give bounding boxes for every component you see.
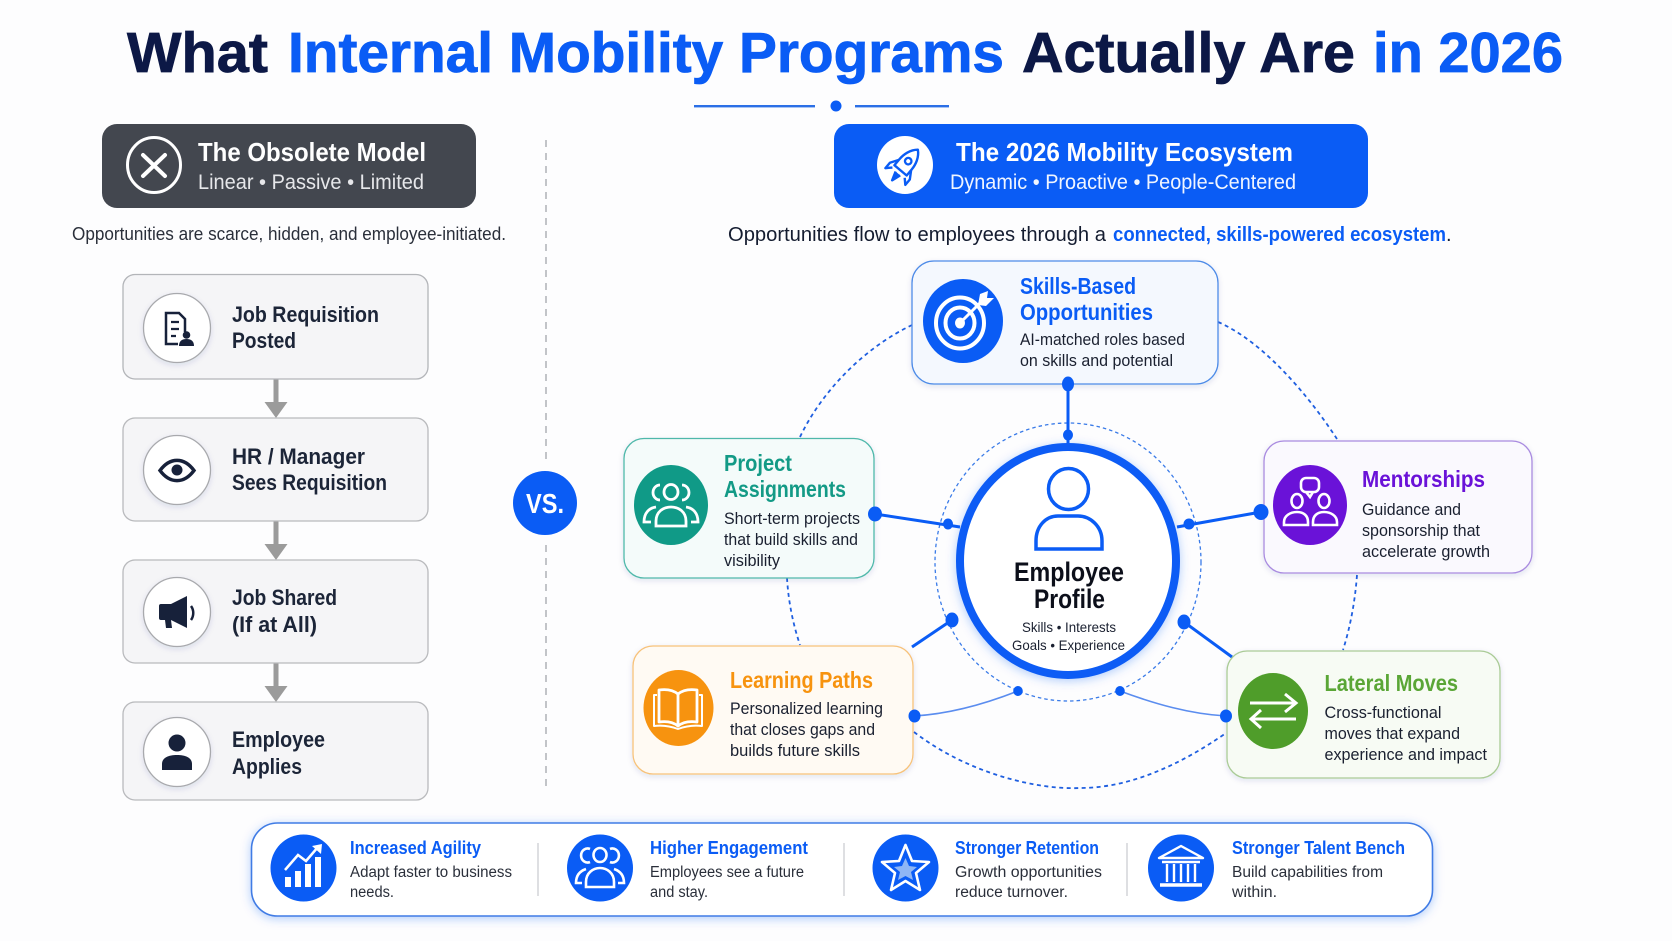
- card: mentorships: sponsorship that: [1362, 522, 1480, 540]
- title: in 2026: [1373, 21, 1563, 85]
- outcome: stronger talent bench: Build capabilities from: [1232, 864, 1383, 881]
- vs badge: VS.: [526, 488, 564, 519]
- card: project assignments: Project: [724, 450, 792, 476]
- icon: institution building: [1159, 846, 1203, 885]
- employee profile hub: Goals • Experience: [1012, 637, 1125, 653]
- icon: team: [644, 484, 698, 526]
- step: hr manager sees requisition: [123, 418, 428, 521]
- title: Internal Mobility Programs: [288, 21, 1004, 85]
- card: project assignments: Short-term projects: [724, 510, 860, 528]
- card: learning paths: Personalized learning: [730, 700, 883, 718]
- icon: rocket: [882, 141, 928, 189]
- card: lateral moves: moves that expand: [1324, 725, 1460, 743]
- title: [127, 21, 1563, 85]
- vs badge: [513, 471, 577, 535]
- step: employee applies: Employee: [232, 727, 325, 752]
- outcome: stronger talent bench: Stronger Talent Bench: [1232, 838, 1405, 858]
- card: skills-based opportunities: on skills and potential: [1020, 352, 1173, 370]
- card: mentorships: [1264, 441, 1532, 573]
- step: hr manager sees requisition: Sees Requisition: [232, 470, 387, 495]
- card: project assignments: that build skills and: [724, 531, 858, 549]
- outcome: increased agility: needs.: [350, 884, 394, 901]
- card: skills-based opportunities: [912, 261, 1218, 384]
- step: job shared: [123, 560, 428, 663]
- title divider: [694, 100, 949, 112]
- panel: outcomes bar: [252, 823, 1432, 916]
- step: employee applies: [123, 702, 428, 800]
- connector lines: [875, 384, 1261, 716]
- panel: 2026 ecosystem header: Dynamic • Proactive • People-Centered: [950, 171, 1296, 194]
- icon: person: [162, 734, 192, 770]
- outcome: higher engagement: Higher Engagement: [650, 838, 808, 858]
- title: What: [127, 21, 268, 85]
- employee profile hub: [960, 447, 1176, 675]
- card: learning paths: builds future skills: [730, 742, 860, 760]
- icon: x in circle: [128, 138, 180, 192]
- outcome: higher engagement: and stay.: [650, 884, 708, 901]
- employee profile hub: Profile: [1034, 584, 1105, 614]
- panel: obsolete model header: The Obsolete Model: [198, 137, 426, 167]
- employee profile hub: Employee: [1014, 557, 1124, 587]
- step: hr manager sees requisition: HR / Manager: [232, 444, 365, 469]
- outcome: stronger retention: [872, 834, 1102, 902]
- step: job shared: Job Shared: [232, 585, 337, 610]
- panel: obsolete model header: [102, 124, 476, 208]
- card: mentorships: Guidance and: [1362, 501, 1461, 519]
- ecosystem description: .: [1446, 224, 1452, 246]
- card: learning paths: that closes gaps and: [730, 721, 875, 739]
- card: project assignments: [624, 438, 874, 578]
- employee profile hub: Skills • Interests: [1022, 619, 1116, 635]
- card: skills-based opportunities: Skills-Based: [1020, 273, 1136, 299]
- icon: team: [576, 848, 624, 887]
- card: learning paths: [633, 646, 913, 774]
- card: lateral moves: Cross-functional: [1324, 704, 1442, 722]
- icon: document with person: [166, 313, 194, 346]
- outcome: increased agility: Increased Agility: [350, 838, 481, 858]
- card: mentorships: Mentorships: [1362, 466, 1485, 492]
- card: learning paths: Learning Paths: [730, 667, 873, 693]
- icon: swap arrows: [1250, 694, 1296, 728]
- connector dots: [868, 376, 1268, 722]
- icon: person outline: [1036, 468, 1102, 549]
- inner dashed orbit: [935, 423, 1201, 701]
- outcome: stronger retention: reduce turnover.: [955, 884, 1068, 901]
- outcome: higher engagement: [567, 834, 808, 902]
- step: employee applies: Applies: [232, 754, 302, 779]
- outcome: stronger talent bench: within.: [1231, 884, 1277, 901]
- card: project assignments: Assignments: [724, 476, 846, 502]
- outcome: stronger talent bench: [1148, 834, 1405, 902]
- ecosystem description: connected, skills-powered ecosystem: [1113, 224, 1446, 246]
- icon: mentors with speech bubble: [1284, 478, 1337, 525]
- card: project assignments: visibility: [724, 552, 781, 570]
- title: Actually Are: [1022, 21, 1355, 85]
- panel: 2026 ecosystem header: The 2026 Mobility Ecosystem: [956, 137, 1293, 167]
- outcome: stronger retention: Stronger Retention: [955, 838, 1099, 858]
- card: lateral moves: experience and impact: [1324, 746, 1487, 764]
- outcome: higher engagement: Employees see a future: [650, 864, 804, 881]
- flow arrows: [264, 379, 288, 702]
- icon: megaphone: [159, 596, 193, 628]
- step: job requisition posted: Posted: [232, 328, 296, 353]
- icon: target with arrow: [936, 291, 994, 348]
- outcome: increased agility: Adapt faster to business: [350, 864, 512, 881]
- step: job requisition posted: [123, 274, 428, 379]
- icon: growth chart: [285, 844, 322, 887]
- outcome: stronger retention: Growth opportunities: [955, 864, 1102, 881]
- outcome: increased agility: [270, 834, 512, 902]
- vertical dashed divider: [545, 140, 547, 790]
- card: lateral moves: Lateral Moves: [1324, 670, 1458, 696]
- icon: open book: [654, 690, 702, 729]
- obsolete model description: Opportunities are scarce, hidden, and employee-initiated.: [72, 224, 506, 244]
- panel: obsolete model header: Linear • Passive • Limited: [198, 171, 424, 194]
- panel: 2026 ecosystem header: [834, 124, 1368, 208]
- card: skills-based opportunities: AI-matched roles based: [1020, 331, 1185, 349]
- ecosystem description: Opportunities flow to employees through a: [728, 224, 1107, 246]
- card: lateral moves: [1227, 651, 1500, 778]
- ecosystem description: [728, 224, 1452, 246]
- outer dashed orbit: [787, 322, 1357, 788]
- icon: star: [882, 845, 929, 890]
- step: job shared: (If at All): [232, 612, 317, 637]
- icon: eye: [160, 460, 194, 481]
- step: job requisition posted: Job Requisition: [232, 302, 379, 327]
- card: skills-based opportunities: Opportunities: [1020, 299, 1153, 325]
- card: mentorships: accelerate growth: [1362, 543, 1490, 561]
